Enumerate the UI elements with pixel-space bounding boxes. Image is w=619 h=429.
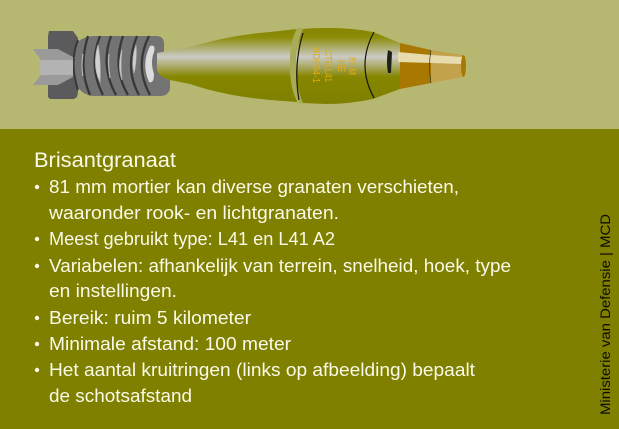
text: grenade markings: 81 M — [346, 57, 358, 75]
credit: Ministerie van Defensie | MCD — [597, 214, 613, 415]
text: grenade markings: HE — [335, 60, 347, 72]
icon: body grooves — [297, 32, 374, 100]
icon: tail boom — [157, 29, 297, 102]
icon: groove band — [290, 28, 303, 104]
panel: text background — [0, 129, 619, 429]
text: grenade markings: CTG L41 — [322, 50, 334, 82]
icon: window slot — [387, 50, 392, 73]
icon: tail fins — [33, 49, 73, 85]
bullet: range: Bereik: ruim 5 kilometer — [49, 308, 251, 328]
panel: illustration background — [0, 0, 619, 129]
icon: fuze tip — [431, 50, 463, 83]
bullet: variables — [35, 256, 511, 301]
bullet: propellant rings: de schotsafstand — [49, 386, 192, 406]
bullet: mortar — [35, 177, 459, 223]
bullet: mortar: 81 mm mortier kan diverse granaten verschieten, — [49, 177, 459, 197]
bullet: mortar: waaronder rook- en lichtgranaten. — [48, 203, 339, 223]
bullet: type: Meest gebruikt type: L41 en L41 A2 — [49, 229, 335, 249]
icon: fuze base — [400, 43, 431, 89]
bullet: minimum distance: Minimale afstand: 100 meter — [49, 334, 291, 354]
bullet: propellant rings — [35, 360, 475, 406]
icon: propellant rings — [74, 36, 170, 96]
icon: main body — [296, 28, 400, 104]
bullet: propellant rings: Het aantal kruitringen (links op afbeelding) bepaalt — [49, 360, 475, 380]
icon: fuze seam — [430, 50, 431, 83]
icon: tail fin block — [48, 31, 78, 99]
text: grenade markings — [310, 47, 358, 83]
text block: bullet list — [35, 177, 511, 406]
bullet: variables: Variabelen: afhankelijk van terrein, snelheid, hoek, type — [49, 256, 511, 276]
icon: fuze highlight — [398, 52, 462, 64]
illustration: mortar grenade — [33, 28, 466, 104]
heading: Brisantgranaat — [34, 148, 176, 172]
bullet: variables: en instellingen. — [49, 281, 177, 301]
icon: fuze end — [461, 55, 466, 77]
text: grenade markings: RDF94-1 — [310, 47, 322, 83]
